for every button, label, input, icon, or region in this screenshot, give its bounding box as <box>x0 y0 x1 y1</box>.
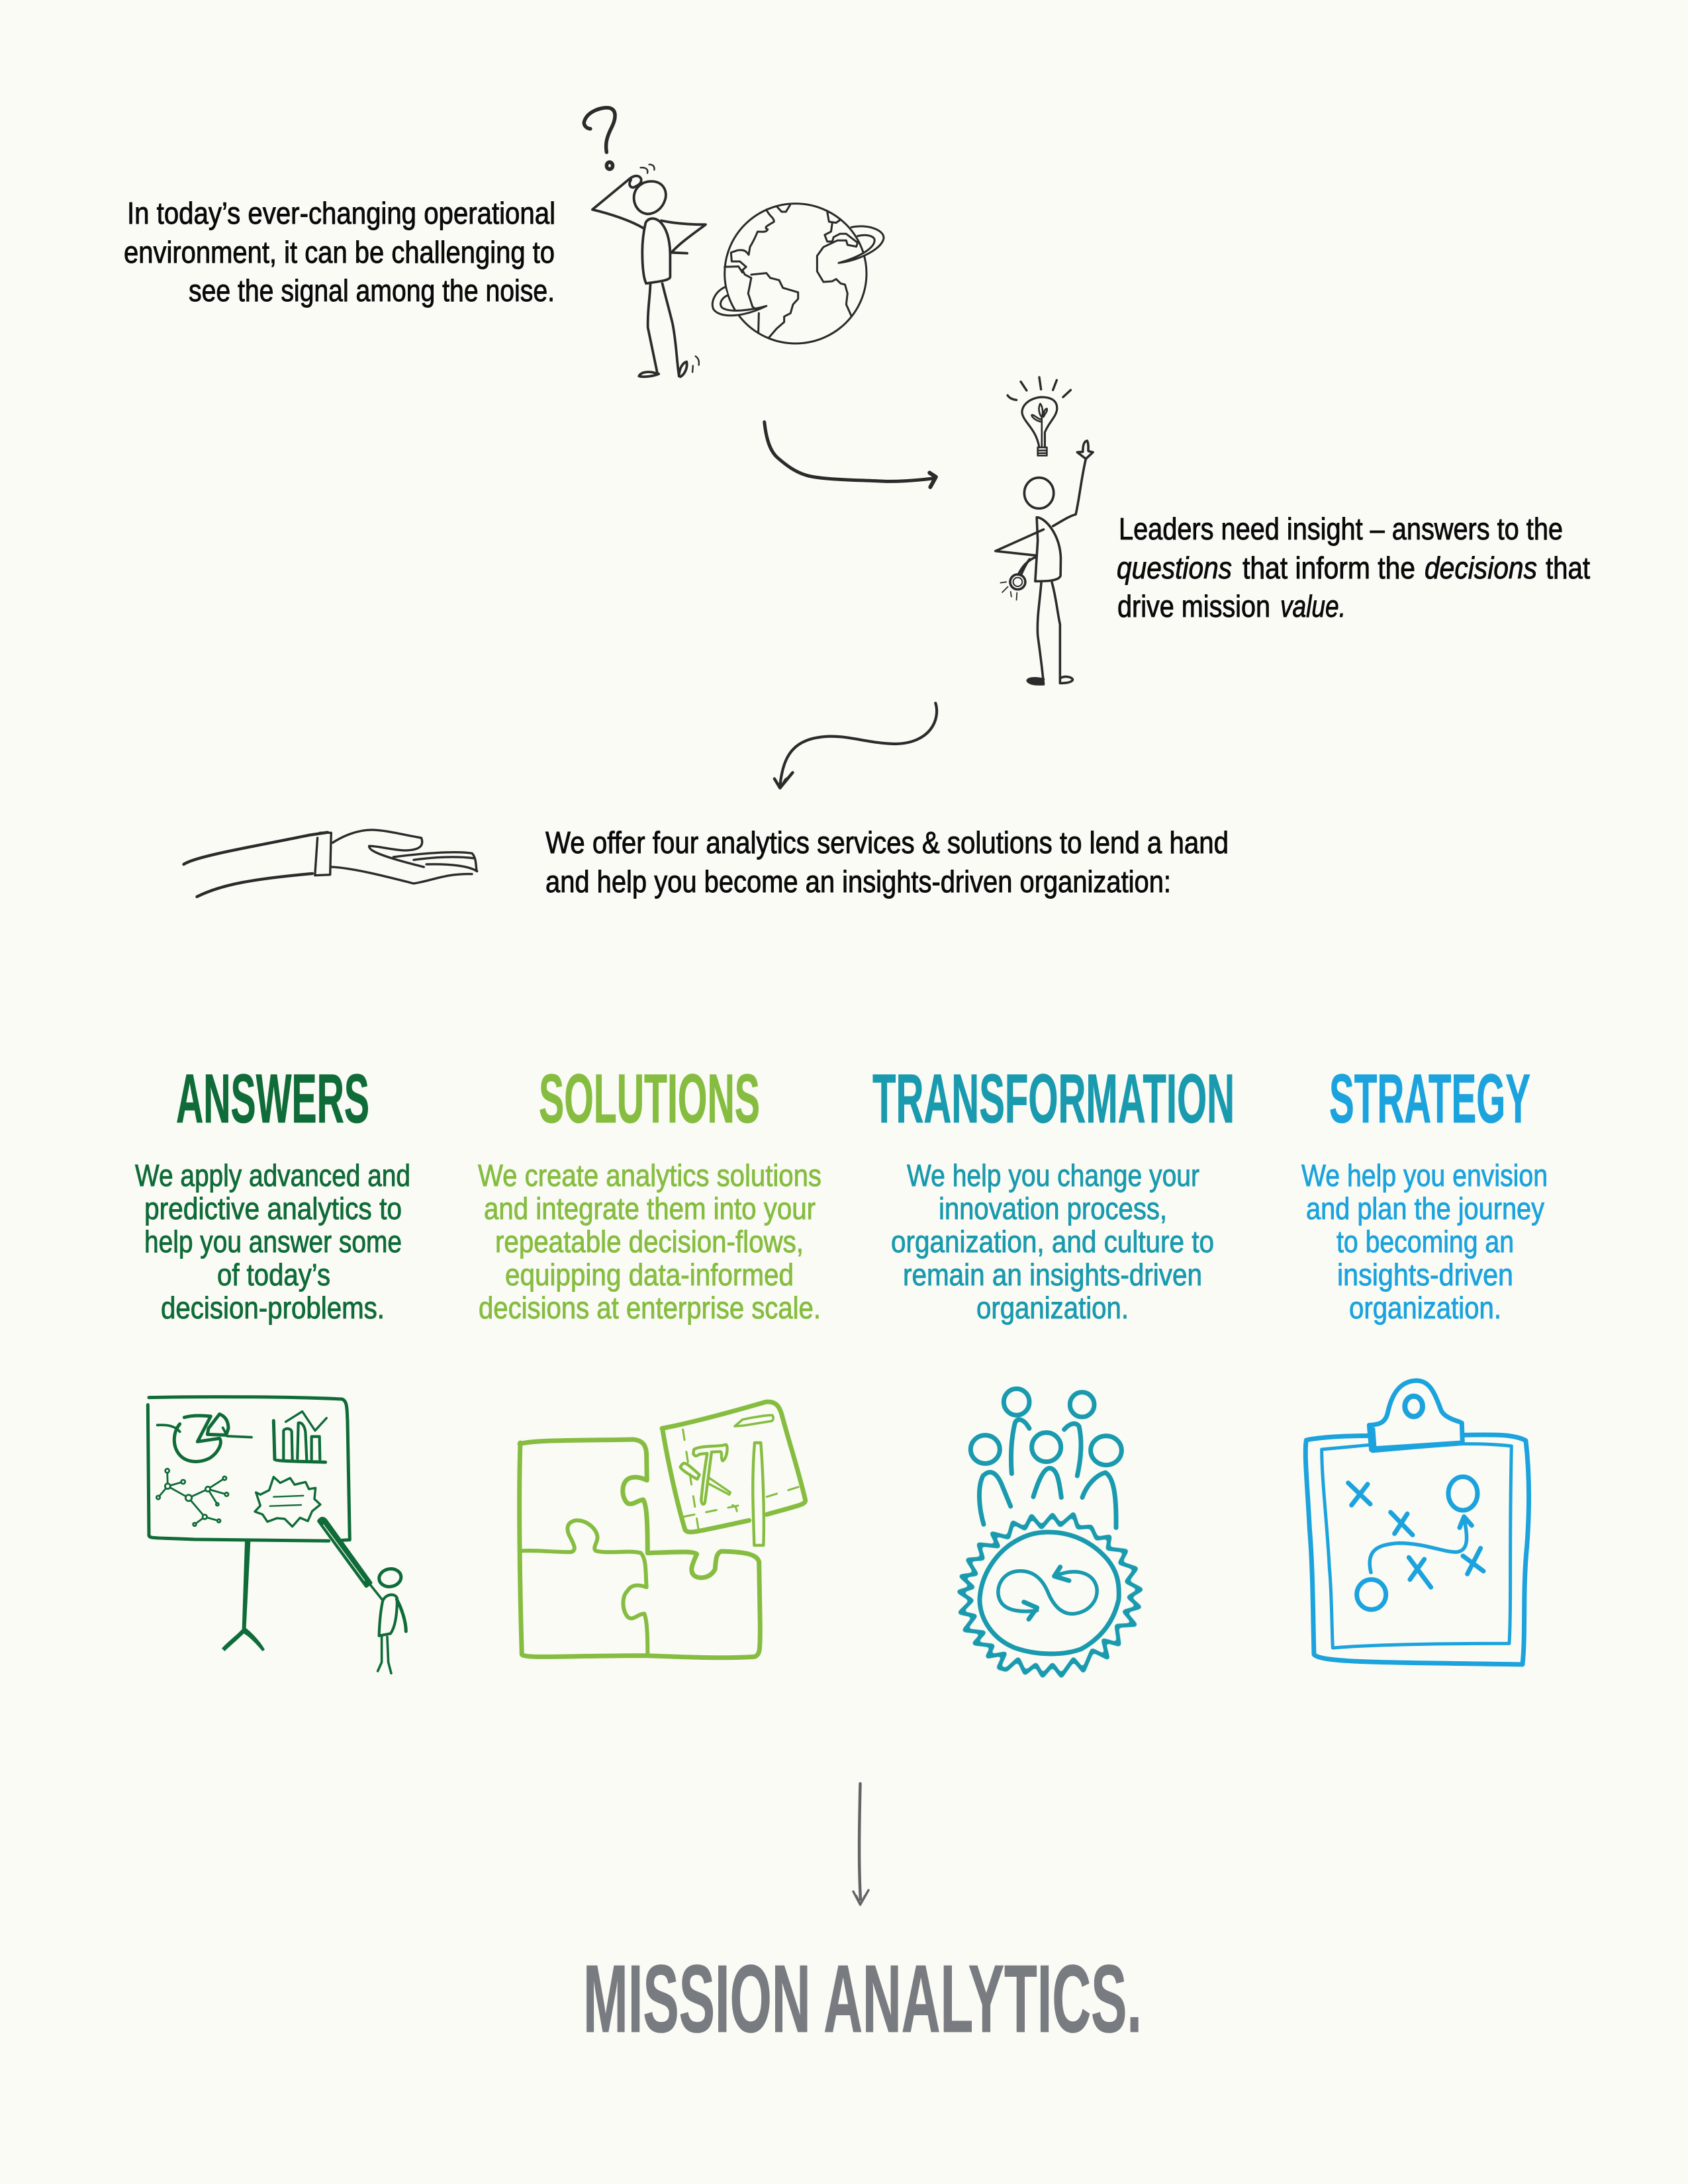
text: operational environment intro: see the signal among the noise. <box>189 273 555 308</box>
heading: answers: ANSWERS <box>176 1060 369 1138</box>
text: answers description <box>135 1158 410 1325</box>
panel: transformation <box>872 1060 1235 1676</box>
text: answers description: We apply advanced and <box>135 1158 410 1193</box>
text: strategy description: to becoming an <box>1336 1224 1514 1259</box>
text: solutions description: decisions at enterprise scale. <box>479 1291 821 1325</box>
icon: presenter at chart board <box>148 1397 406 1673</box>
icon: globe <box>712 204 884 343</box>
icon: question mark <box>584 108 615 169</box>
text: strategy description <box>1301 1158 1548 1325</box>
text: answers description: decision-problems. <box>161 1291 385 1325</box>
icon: people above gear <box>959 1388 1141 1676</box>
text: leaders need insight: drive mission <box>1117 589 1270 623</box>
text: strategy description: insights-driven <box>1337 1257 1513 1292</box>
text: answers description: predictive analytics to <box>144 1191 402 1226</box>
text: leaders need insight: value. <box>1280 589 1346 623</box>
text: operational environment intro <box>124 196 555 308</box>
text: leaders need insight: that inform the <box>1243 551 1415 585</box>
text: solutions description <box>478 1158 821 1325</box>
arrow: curved down-left <box>773 703 937 789</box>
icon: open hand <box>184 830 477 897</box>
text: strategy description: We help you envision <box>1301 1158 1548 1193</box>
text: strategy description: and plan the journey <box>1306 1191 1544 1226</box>
text: leaders need insight <box>1117 512 1590 623</box>
text: strategy description: organization. <box>1349 1291 1501 1325</box>
heading: transformation: TRANSFORMATION <box>872 1060 1235 1138</box>
text: four services intro: We offer four analytics services & solutions to lend a hand <box>545 825 1229 860</box>
heading: solutions: SOLUTIONS <box>539 1060 760 1138</box>
text: solutions description: repeatable decision-flows, <box>495 1224 804 1259</box>
panel: strategy <box>1301 1060 1548 1664</box>
panel: answers <box>135 1060 410 1673</box>
text: four services intro <box>545 825 1229 899</box>
text: transformation description: organization. <box>976 1291 1129 1325</box>
text: solutions description: We create analytics solutions <box>478 1158 821 1193</box>
icon: clipboard with play diagram <box>1305 1381 1529 1664</box>
text: answers description: help you answer some <box>144 1224 402 1259</box>
arrow and person with lightbulb <box>765 377 1093 684</box>
text: operational environment intro: In today’s ever-changing operational <box>127 196 555 230</box>
icon: thinking person <box>592 165 706 377</box>
icon: person pointing up <box>996 441 1093 684</box>
icon: puzzled person with globe <box>584 108 884 377</box>
text: transformation description: remain an insights-driven <box>903 1257 1202 1292</box>
arrow: down to mission analytics <box>853 1784 869 1906</box>
text: operational environment intro: environment, it can be challenging to <box>124 235 555 269</box>
text: transformation description: We help you change your <box>907 1158 1199 1193</box>
text: solutions description: and integrate them into your <box>484 1191 816 1226</box>
panel: solutions <box>478 1060 821 1658</box>
text: transformation description: organization, and culture to <box>891 1224 1214 1259</box>
icon: lightbulb <box>1008 377 1070 455</box>
text: leaders need insight: Leaders need insight – answers to the <box>1119 512 1563 546</box>
arrow: curved right <box>765 422 936 487</box>
text: leaders need insight: questions <box>1117 551 1232 585</box>
text: transformation description <box>891 1158 1214 1325</box>
icon: puzzle pieces and blueprint <box>520 1402 806 1658</box>
heading: mission analytics: MISSION ANALYTICS. <box>583 1945 1142 2052</box>
text: solutions description: equipping data-informed <box>505 1257 794 1292</box>
text: leaders need insight: decisions <box>1425 551 1537 585</box>
arrow and open hand <box>184 703 937 897</box>
text: answers description: of today’s <box>217 1257 330 1292</box>
text: transformation description: innovation process, <box>939 1191 1167 1226</box>
text: four services intro: and help you become an insights-driven organization: <box>545 864 1171 899</box>
text: leaders need insight: that <box>1546 551 1590 585</box>
